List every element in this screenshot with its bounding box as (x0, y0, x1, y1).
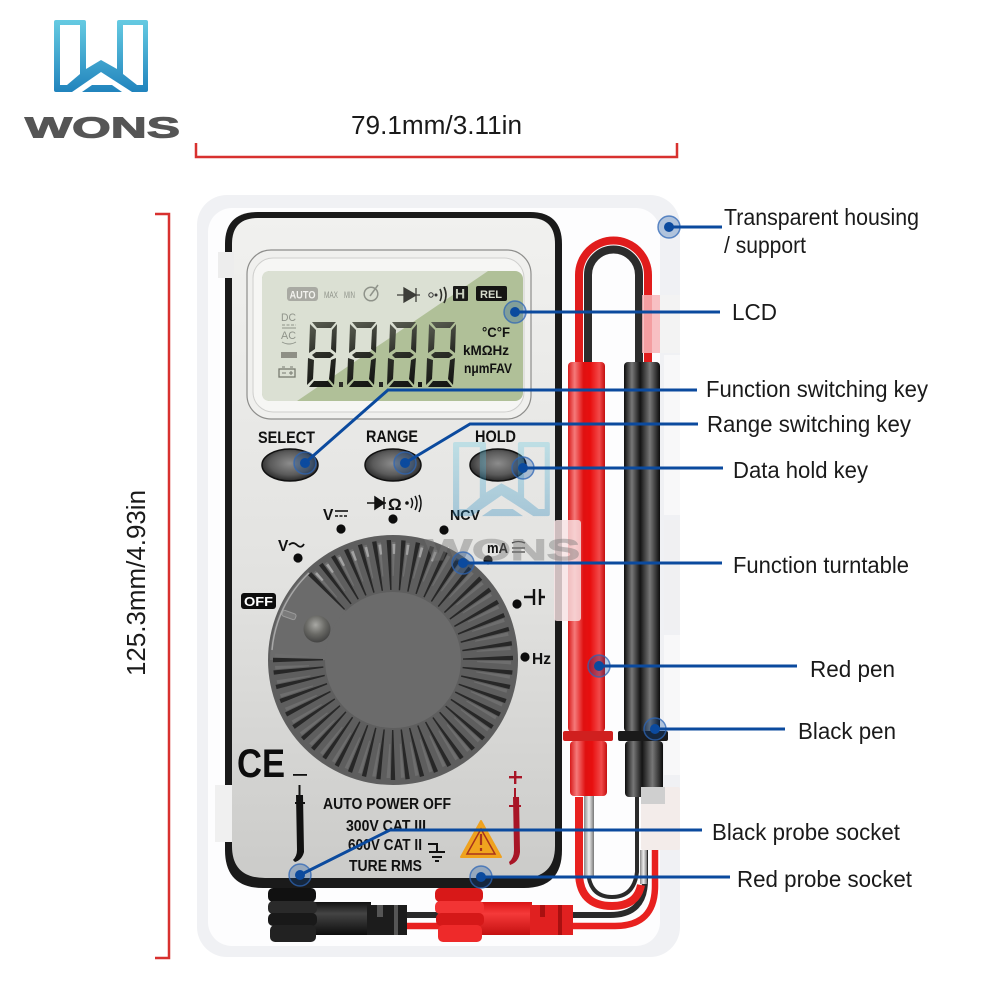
dial position labels (278, 495, 551, 668)
icon: warning triangle (461, 821, 501, 857)
dimension: height: 125.3mm/4.93in (123, 490, 151, 676)
dial ribs (273, 540, 513, 780)
LCD unit indicators (279, 312, 297, 377)
red pen (563, 362, 613, 878)
label: function turntable: Function turntable (733, 552, 909, 578)
black pen (618, 362, 668, 884)
dial pointer and knob dot (281, 610, 330, 642)
dial position labels: NCV (450, 507, 480, 524)
leader: range switching key (394, 424, 698, 474)
logo: WONS brand mark (25, 20, 180, 144)
leader: function switching key (294, 390, 697, 474)
logo: WONS brand mark: WONS (25, 112, 180, 144)
socket text block: AUTO POWER OFF (323, 796, 451, 813)
dial position dots (293, 514, 530, 662)
LCD status icons: AUTO (290, 290, 316, 302)
leader: transparent housing (658, 216, 722, 238)
dial position labels: Ω (388, 495, 402, 514)
LCD unit text: nμmFAV (464, 361, 512, 376)
label: data hold key: Data hold key (733, 457, 868, 483)
dial position labels: Hz (532, 651, 551, 668)
label: transparent housing (724, 204, 919, 258)
OFF label (241, 593, 276, 609)
LCD status icons: MIN (344, 290, 355, 301)
OFF label: OFF (244, 594, 273, 609)
LCD status icons: H (455, 286, 465, 302)
label: range switching key: Range switching key (707, 411, 911, 437)
label: transparent housing: / support (724, 232, 807, 258)
black probe icon (293, 774, 307, 862)
dimension: width: 79.1mm/3.11in (351, 112, 522, 140)
leader: function turntable (452, 552, 722, 574)
button labels: RANGE (366, 428, 418, 446)
CE mark: CE (237, 742, 285, 786)
leader: red probe socket (470, 866, 730, 888)
LCD status icons: REL (480, 289, 502, 301)
dimension: width (196, 112, 677, 157)
socket text block: TURE RMS (349, 858, 422, 875)
black connector (268, 888, 407, 942)
leader: black pen (644, 718, 785, 740)
socket text block: 600V CAT II (348, 837, 422, 854)
socket text block (323, 796, 451, 875)
button labels (258, 428, 516, 447)
dimension: height (123, 214, 169, 958)
LCD unit text: °C°F (482, 324, 510, 340)
LCD status icons: MAX (324, 290, 338, 301)
LCD digits 8.8.8.8 (307, 322, 456, 387)
dial position labels: V (278, 538, 289, 555)
buttons (262, 449, 526, 481)
dial position labels: mA (487, 540, 508, 557)
test lead wires (400, 240, 655, 926)
red connector (435, 888, 573, 942)
LCD screen (262, 271, 523, 401)
leader: black probe socket (289, 830, 702, 886)
function turntable dial (268, 535, 518, 785)
button labels: SELECT (258, 429, 315, 447)
meter body (215, 212, 562, 888)
label: transparent housing: Transparent housing (724, 204, 919, 230)
transparent housing (197, 195, 680, 957)
middle housing clip (554, 520, 581, 621)
label: black pen: Black pen (798, 718, 896, 744)
label: LCD: LCD (732, 299, 777, 325)
leader: data hold key (512, 457, 723, 479)
icon: ground (428, 844, 445, 861)
LCD unit text: kMΩHz (463, 343, 509, 358)
watermark logo: WONS (425, 534, 580, 567)
red probe icon (509, 771, 522, 865)
leader: LCD (504, 301, 720, 323)
LCD bezel (247, 250, 531, 419)
leader: red pen (588, 655, 797, 677)
label: function switching key: Function switching key (706, 376, 928, 402)
LCD status icons (287, 285, 507, 303)
label: red probe socket: Red probe socket (737, 866, 913, 892)
label: red pen: Red pen (810, 656, 895, 682)
label: black probe socket: Black probe socket (712, 819, 901, 845)
LCD unit indicators: DC (281, 312, 296, 324)
LCD unit text (463, 324, 512, 376)
LCD unit indicators: AC (281, 330, 296, 342)
housing clips (641, 295, 680, 850)
watermark logo (425, 442, 580, 567)
dial position labels: V (323, 507, 334, 524)
button labels: HOLD (475, 428, 516, 446)
socket text block: 300V CAT III (346, 818, 426, 835)
